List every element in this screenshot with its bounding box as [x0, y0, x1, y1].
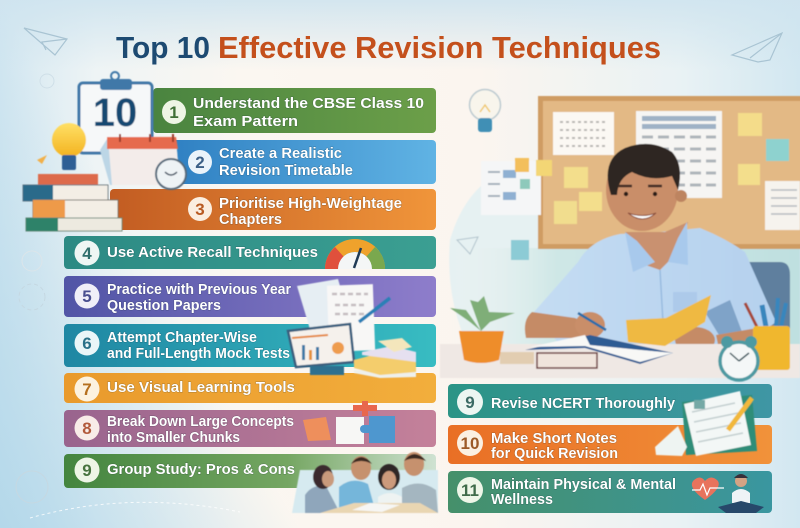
- wall backdrop: [449, 100, 800, 350]
- panel: item 6: 6: [82, 334, 92, 353]
- desk: [440, 344, 800, 378]
- illustration: papers, monitor and books: [288, 279, 416, 378]
- title: Top 10: [116, 30, 210, 65]
- panel: item 5: [64, 276, 436, 317]
- title: Effective Revision Techniques: [218, 30, 661, 65]
- panel: item 6: and Full-Length Mock Tests: [107, 346, 290, 362]
- icon: clipboard with 10: [79, 72, 152, 153]
- icon: heart with pulse: [692, 478, 724, 500]
- panel: right item 9: 9: [465, 393, 475, 412]
- panel: right item 11: [448, 471, 772, 513]
- panel: right item 10: 10: [461, 434, 479, 453]
- icon: corkboard: [538, 96, 800, 249]
- icon: chair: [745, 262, 790, 340]
- icon: question papers: [297, 279, 390, 352]
- panel: right item 11: Maintain Physical & Mental: [491, 477, 676, 493]
- icon: paper stack: [354, 338, 416, 378]
- icon: meditating figure: [718, 474, 764, 513]
- panel: item 6: [64, 324, 436, 367]
- panel: item 7: [64, 373, 436, 403]
- panel: item 1: Understand the CBSE Class 10: [193, 96, 424, 112]
- icon: stack of books: [23, 174, 122, 231]
- panel: right item 11: Wellness: [491, 492, 553, 508]
- icon group: clipboard, bulb, calendar and books: [23, 72, 186, 231]
- panel: item 8: into Smaller Chunks: [107, 430, 240, 446]
- panel: item 9: 9: [82, 461, 92, 480]
- icon: monitor with charts: [288, 324, 354, 375]
- panel: item 9: Group Study: Pros & Cons: [107, 462, 295, 478]
- panel: item 1: 1: [169, 103, 179, 122]
- panel: right item 10: for Quick Revision: [491, 446, 618, 462]
- panel: item 2: Create a Realistic: [219, 146, 342, 162]
- panel: right scene: [440, 90, 800, 380]
- panel: item 7: Use Visual Learning Tools: [107, 380, 295, 396]
- illustration: notebook and pencil: [655, 391, 757, 456]
- panel: item 2: Revision Timetable: [219, 163, 353, 179]
- panel: right item 9: [448, 384, 772, 418]
- panel: right item 10: Make Short Notes: [491, 431, 617, 447]
- illustration: study group: [292, 452, 438, 513]
- icon: calendar: [100, 134, 180, 185]
- icon: paper plane right: [732, 33, 782, 62]
- panel: item 4: [64, 236, 436, 269]
- panel: item 8: Break Down Large Concepts: [107, 414, 294, 430]
- panel: item 5: Question Papers: [107, 298, 221, 314]
- panel: item 8: [64, 401, 436, 447]
- panel: item 3: [110, 189, 436, 230]
- icon: alarm clock: [720, 336, 758, 380]
- icon: light bulb on wall: [470, 90, 500, 132]
- icon: wall planner: [457, 158, 552, 260]
- icon: pen cup: [745, 298, 790, 370]
- icon: paper plane left: [24, 28, 67, 55]
- panel: item 3: 3: [195, 200, 205, 219]
- icon: gauge: [325, 239, 385, 269]
- panel: item 9: [64, 452, 438, 513]
- panel: item 1: [153, 88, 436, 133]
- panel: right item 11: 11: [461, 481, 479, 500]
- panel: item 5: 5: [82, 287, 92, 306]
- panel: item 4: Use Active Recall Techniques: [107, 245, 318, 261]
- icon: clipboard with 10: 10: [93, 91, 137, 135]
- panel: right item 9: Revise NCERT Thoroughly: [491, 396, 675, 412]
- icon: yellow book: [626, 295, 711, 346]
- panel: item 3: Prioritise High-Weightage: [219, 196, 402, 212]
- panel: item 3: Chapters: [219, 212, 282, 228]
- panel: item 4: 4: [82, 244, 92, 263]
- panel: right item 10: [448, 425, 772, 464]
- icon: small clock: [156, 159, 186, 189]
- panel: item 7: 7: [82, 380, 92, 399]
- panel: item 6: Attempt Chapter-Wise: [107, 330, 257, 346]
- student: [525, 144, 776, 354]
- panel: item 2: 2: [195, 153, 205, 172]
- panel: item 5: Practice with Previous Year: [107, 282, 291, 298]
- icon: light bulb: [37, 123, 86, 170]
- panel: item 1: Exam Pattern: [193, 114, 298, 130]
- icon: puzzle pieces: [303, 401, 395, 444]
- icon: potted plant: [450, 296, 515, 363]
- icon: open book: [500, 335, 673, 368]
- panel: item 8: 8: [82, 419, 92, 438]
- panel: item 2: [170, 140, 436, 184]
